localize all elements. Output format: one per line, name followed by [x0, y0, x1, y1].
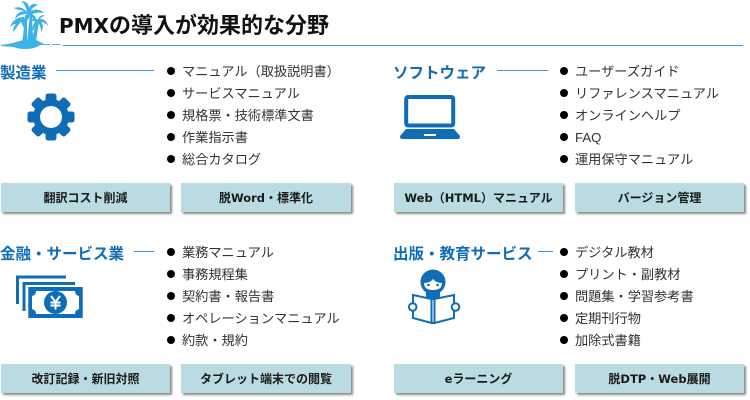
button: translation cost: 翻訳コスト削減 — [43, 191, 128, 205]
list: publishing documents: プリント・副教材 — [575, 267, 680, 282]
list: publishing documents: 問題集・学習参考書 — [575, 289, 694, 304]
logo: palm trees island — [1, 1, 60, 49]
icon: gear — [28, 94, 74, 140]
list: finance documents: 約款・規約 — [182, 333, 248, 348]
panel: publishing and education — [393, 245, 748, 396]
list: publishing documents: デジタル教材 — [575, 245, 654, 260]
title: PMXの導入が効果的な分野 — [59, 13, 329, 38]
list: manufacturing documents: サービスマニュアル — [182, 86, 300, 101]
list: software documents: オンラインヘルプ — [575, 108, 680, 123]
panel: finance and services — [0, 245, 354, 396]
button: version control — [575, 183, 744, 212]
list: finance documents: 契約書・報告書 — [182, 289, 274, 304]
icon: laptop — [400, 95, 460, 139]
list: publishing documents — [560, 245, 694, 348]
list: manufacturing documents: 規格票・技術標準文書 — [182, 108, 314, 123]
button: web html manual: Web（HTML）マニュアル — [404, 191, 553, 205]
button: web html manual — [394, 183, 563, 212]
list: manufacturing documents: 作業指示書 — [182, 130, 248, 145]
button: revision records: 改訂記録・新旧対照 — [31, 372, 140, 386]
list: finance documents: オペレーションマニュアル — [182, 311, 340, 326]
button: away from Word: 脱Word・標準化 — [219, 191, 313, 205]
list: finance documents: 事務規程集 — [182, 267, 248, 282]
list: manufacturing documents — [167, 64, 340, 167]
icon: person reading — [408, 270, 460, 324]
heading: software: ソフトウェア — [393, 65, 486, 82]
list: software documents: ユーザーズガイド — [575, 64, 680, 79]
list: publishing documents: 加除式書籍 — [575, 333, 641, 348]
panel: manufacturing — [0, 64, 354, 216]
list: finance documents: 業務マニュアル — [182, 245, 274, 260]
list: software documents: FAQ — [575, 130, 601, 145]
list: software documents: リファレンスマニュアル — [575, 86, 719, 101]
button: e-learning: eラーニング — [445, 372, 512, 386]
list: software documents — [560, 64, 719, 167]
panel: software — [393, 64, 748, 216]
list: software documents: 運用保守マニュアル — [575, 152, 693, 167]
list: publishing documents: 定期刊行物 — [575, 311, 641, 326]
button: version control: バージョン管理 — [618, 191, 701, 205]
button: revision records — [1, 364, 170, 393]
heading: publishing: 出版・教育サービス — [393, 246, 533, 263]
button: away from Word — [181, 183, 351, 212]
button: tablet viewing: タブレット端末での閲覧 — [200, 372, 332, 386]
icon: yen banknotes — [16, 276, 83, 318]
heading: finance: 金融・サービス業 — [0, 246, 124, 263]
button: translation cost — [1, 183, 170, 212]
list: finance documents — [167, 245, 340, 348]
list: manufacturing documents: マニュアル（取扱説明書） — [182, 64, 340, 79]
heading: manufacturing: 製造業 — [0, 65, 47, 82]
button: away from DTP — [575, 364, 744, 393]
button: e-learning — [394, 364, 563, 393]
list: manufacturing documents: 総合カタログ — [182, 152, 261, 167]
button: away from DTP: 脱DTP・Web展開 — [608, 372, 711, 386]
button: tablet viewing — [181, 364, 351, 393]
